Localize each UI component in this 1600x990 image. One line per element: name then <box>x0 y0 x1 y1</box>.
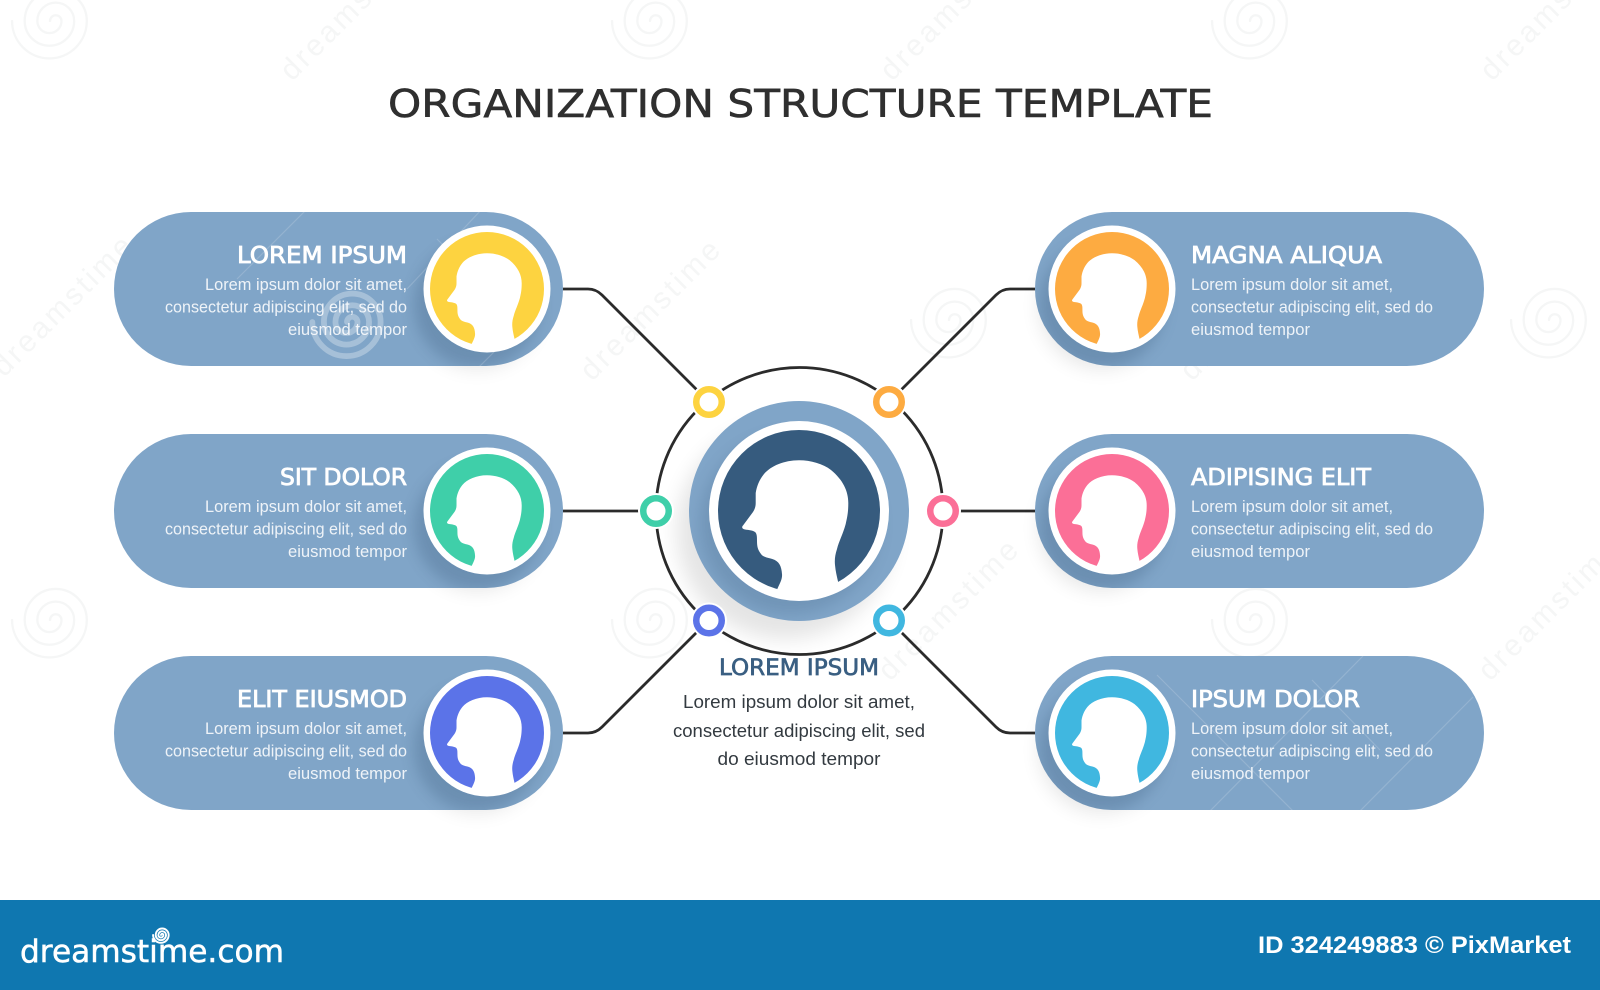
panel: lorem ipsum: consectetur adipiscing elit, sed do <box>165 299 407 317</box>
footer band <box>0 900 1600 990</box>
central text block: Lorem ipsum dolor sit amet, <box>683 691 915 712</box>
panel: magna aliqua <box>1035 212 1484 368</box>
panel: sit dolor: Lorem ipsum dolor sit amet, <box>205 498 407 516</box>
central text block: do eiusmod tempor <box>718 748 880 769</box>
panel: lorem ipsum: eiusmod tempor <box>288 321 407 339</box>
central text block: LOREM IPSUM <box>719 656 879 681</box>
panel: adipising elit: ADIPISING ELIT <box>1191 465 1372 491</box>
panel: sit dolor: SIT DOLOR <box>280 465 407 491</box>
watermark spiral over first panel <box>312 294 381 356</box>
panel: ipsum dolor: consectetur adipiscing elit, sed do <box>1191 743 1433 761</box>
background watermarks: dreamstime <box>1174 232 1329 387</box>
background watermarks: dreamstime <box>872 532 1027 687</box>
connector node: yellow <box>691 384 727 420</box>
central text block: consectetur adipiscing elit, sed <box>673 720 925 741</box>
panel: magna aliqua: eiusmod tempor <box>1191 321 1310 339</box>
panel: magna aliqua: MAGNA ALIQUA <box>1191 243 1382 269</box>
footer logo: dreamstime.com <box>20 934 284 970</box>
panel: sit dolor <box>114 434 563 590</box>
connector node: orange <box>871 384 907 420</box>
panel: lorem ipsum: LOREM IPSUM <box>237 243 407 269</box>
connector node: green <box>638 493 674 529</box>
footer credit: ID 324249883 © PixMarket <box>1258 932 1571 959</box>
panel: adipising elit <box>1035 434 1484 590</box>
panel: elit eiusmod: consectetur adipiscing elit, sed do <box>165 743 407 761</box>
panel: elit eiusmod: ELIT EIUSMOD <box>237 687 407 713</box>
panel: ipsum dolor: Lorem ipsum dolor sit amet, <box>1191 720 1393 738</box>
panel: elit eiusmod <box>114 656 563 812</box>
panel: ipsum dolor: IPSUM DOLOR <box>1191 687 1360 713</box>
panel: elit eiusmod: eiusmod tempor <box>288 765 407 783</box>
connector lines <box>563 289 1035 733</box>
panel: elit eiusmod: Lorem ipsum dolor sit amet, <box>205 720 407 738</box>
connector node: pink <box>925 493 961 529</box>
central text block <box>673 656 925 769</box>
background watermarks: dreamstime <box>574 232 729 387</box>
title: ORGANIZATION STRUCTURE TEMPLATE <box>388 82 1213 126</box>
panel: sit dolor: consectetur adipiscing elit, sed do <box>165 521 407 539</box>
connector node: indigo <box>691 602 727 638</box>
panel: adipising elit: consectetur adipiscing elit, sed do <box>1191 521 1433 539</box>
central node <box>677 401 909 639</box>
panel: lorem ipsum: Lorem ipsum dolor sit amet, <box>205 276 407 294</box>
panel: sit dolor: eiusmod tempor <box>288 543 407 561</box>
panel: magna aliqua: consectetur adipiscing elit, sed do <box>1191 299 1433 317</box>
background watermarks <box>0 0 1600 687</box>
panel: lorem ipsum <box>114 209 563 369</box>
panel: magna aliqua: Lorem ipsum dolor sit amet, <box>1191 276 1393 294</box>
connector node: sky blue <box>871 602 907 638</box>
panel: ipsum dolor: eiusmod tempor <box>1191 765 1310 783</box>
panel: ipsum dolor <box>1035 656 1484 812</box>
panel: adipising elit: eiusmod tempor <box>1191 543 1310 561</box>
panel: adipising elit: Lorem ipsum dolor sit amet, <box>1191 498 1393 516</box>
